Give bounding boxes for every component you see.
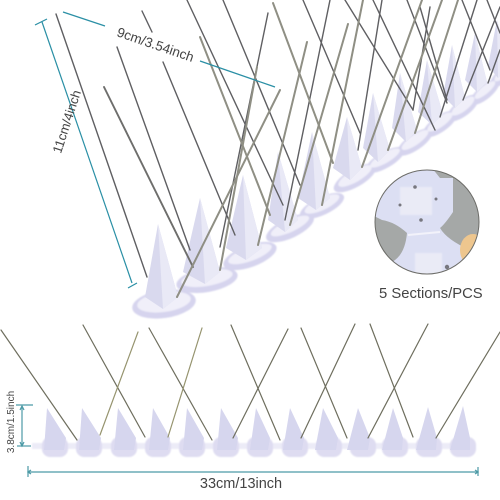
side view spikes — [44, 406, 470, 450]
close-up: fingertip — [460, 234, 477, 260]
dimension: spike width 9cm/3.54inch: 9cm/3.54inch — [115, 25, 196, 65]
strip base blobs — [130, 59, 500, 322]
dimension: base height 3.8cm/1.5inch: 3.8cm/1.5inch — [6, 391, 17, 453]
side view wires — [1, 324, 500, 440]
dimension: spike height 11cm/4inch — [35, 19, 137, 288]
dimension: base height 3.8cm/1.5inch — [6, 391, 33, 453]
caption: sections per piece: 5 Sections/PCS — [379, 286, 483, 302]
spike cones — [145, 20, 500, 309]
dimension: length 33cm/13inch: 33cm/13inch — [200, 476, 282, 492]
dimension: spike width 9cm/3.54inch — [63, 12, 275, 87]
dimension: length 33cm/13inch — [28, 466, 478, 492]
stainless steel wires — [56, 0, 500, 297]
product: side view bird spike strip — [1, 324, 500, 457]
detail circle: base close-up photo — [374, 170, 480, 274]
product: angled bird spike strip — [56, 0, 500, 322]
dimension: spike height 11cm/4inch: 11cm/4inch — [49, 88, 84, 155]
side view base strip — [32, 437, 476, 457]
close-up: translucent base piece — [376, 170, 462, 272]
